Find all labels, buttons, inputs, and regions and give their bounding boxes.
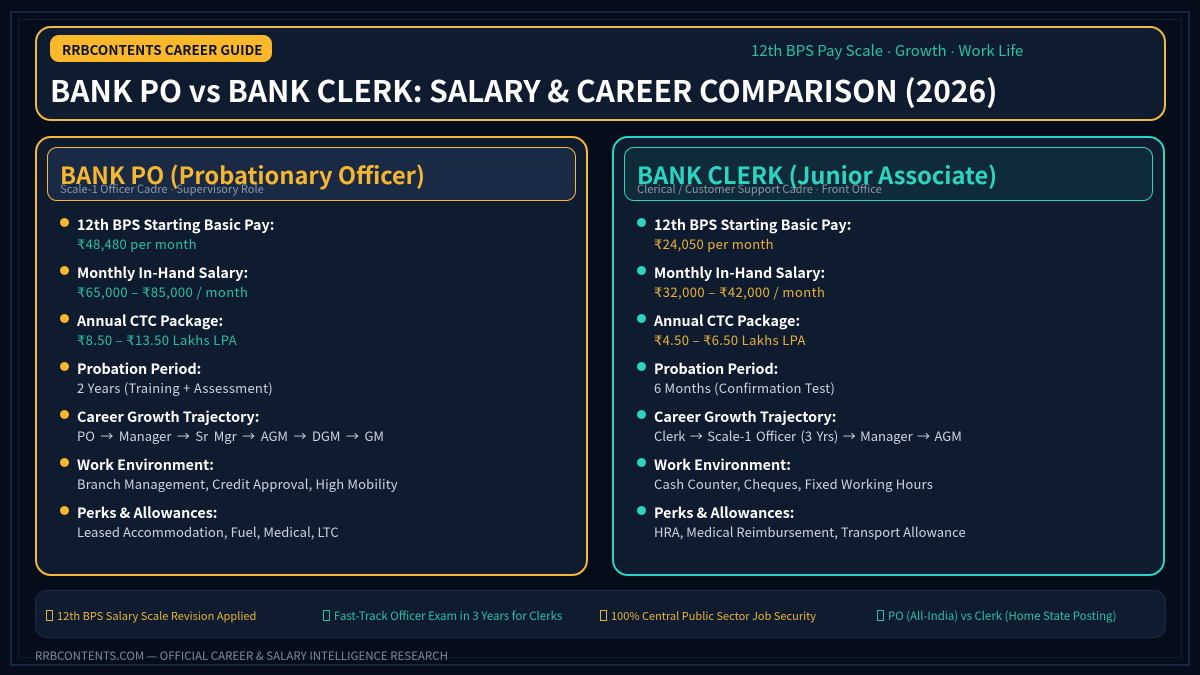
panel: bank po bbox=[35, 136, 588, 576]
item: perks bbox=[637, 506, 646, 515]
text: Cash Counter, Cheques, Fixed Working Hours bbox=[654, 474, 933, 493]
item: basic pay bbox=[60, 218, 69, 227]
text: ₹4.50 – ₹6.50 Lakhs LPA bbox=[654, 330, 806, 349]
text: ₹8.50 – ₹13.50 Lakhs LPA bbox=[77, 330, 237, 349]
header panel bbox=[35, 26, 1166, 121]
note: posting: PO (All-India) vs Clerk (Home State Posting) bbox=[888, 608, 1116, 624]
text: Career Growth Trajectory: bbox=[654, 406, 836, 427]
item: in-hand bbox=[637, 266, 646, 275]
badge bbox=[50, 35, 272, 62]
item: environment bbox=[637, 458, 646, 467]
text: 12th BPS Starting Basic Pay: bbox=[77, 214, 274, 235]
item: probation bbox=[60, 362, 69, 371]
text: 12th BPS Starting Basic Pay: bbox=[654, 214, 851, 235]
text: PO → Manager → Sr Mgr → AGM → DGM → GM bbox=[77, 426, 384, 445]
item: environment bbox=[60, 458, 69, 467]
text: ₹48,480 per month bbox=[77, 234, 197, 253]
text: ₹32,000 – ₹42,000 / month bbox=[654, 282, 825, 301]
text: Monthly In-Hand Salary: bbox=[77, 262, 248, 283]
text: Monthly In-Hand Salary: bbox=[654, 262, 825, 283]
text: HRA, Medical Reimbursement, Transport Allowance bbox=[654, 522, 966, 541]
item: probation bbox=[637, 362, 646, 371]
heading text: bank po: BANK PO (Probationary Officer) bbox=[60, 157, 425, 191]
text: Branch Management, Credit Approval, High Mobility bbox=[77, 474, 398, 493]
text: Perks & Allowances: bbox=[77, 502, 217, 523]
panel heading: bank clerk bbox=[624, 147, 1153, 201]
text: 6 Months (Confirmation Test) bbox=[654, 378, 835, 397]
heading text: bank clerk: BANK CLERK (Junior Associate) bbox=[637, 157, 997, 191]
note: fast track: Fast-Track Officer Exam in 3 Years for Clerks bbox=[334, 608, 562, 624]
text: Probation Period: bbox=[654, 358, 778, 379]
text: Clerk → Scale-1 Officer (3 Yrs) → Manager → AGM bbox=[654, 426, 962, 445]
text: Annual CTC Package: bbox=[77, 310, 223, 331]
text: ₹24,050 per month bbox=[654, 234, 774, 253]
title: BANK PO vs BANK CLERK: SALARY & CAREER COMPARISON (2026) bbox=[50, 67, 997, 111]
item: ctc bbox=[637, 314, 646, 323]
panel heading: bank po bbox=[47, 147, 576, 201]
subheading: bank clerk: Clerical / Customer Support Cadre · Front Office bbox=[637, 181, 882, 197]
item: in-hand bbox=[60, 266, 69, 275]
badge text: RRBCONTENTS CAREER GUIDE bbox=[62, 39, 263, 59]
footer strip bbox=[35, 590, 1166, 638]
item: basic pay bbox=[637, 218, 646, 227]
text: Probation Period: bbox=[77, 358, 201, 379]
subtitle: 12th BPS Pay Scale · Growth · Work Life bbox=[751, 40, 1023, 61]
text: 2 Years (Training + Assessment) bbox=[77, 378, 273, 397]
note: salary revision: 12th BPS Salary Scale Revision Applied bbox=[57, 608, 256, 624]
text: Perks & Allowances: bbox=[654, 502, 794, 523]
panel: bank clerk bbox=[612, 136, 1165, 576]
item: perks bbox=[60, 506, 69, 515]
text: Annual CTC Package: bbox=[654, 310, 800, 331]
item: growth bbox=[60, 410, 69, 419]
text: Work Environment: bbox=[77, 454, 214, 475]
footer credit: RRBCONTENTS.COM — OFFICIAL CAREER & SALARY INTELLIGENCE RESEARCH bbox=[35, 648, 448, 664]
text: Work Environment: bbox=[654, 454, 791, 475]
text: Career Growth Trajectory: bbox=[77, 406, 259, 427]
subheading: bank po: Scale-1 Officer Cadre · Supervisory Role bbox=[60, 181, 264, 197]
note: job security: 100% Central Public Sector Job Security bbox=[611, 608, 816, 624]
item: ctc bbox=[60, 314, 69, 323]
text: Leased Accommodation, Fuel, Medical, LTC bbox=[77, 522, 339, 541]
text: ₹65,000 – ₹85,000 / month bbox=[77, 282, 248, 301]
item: growth bbox=[637, 410, 646, 419]
